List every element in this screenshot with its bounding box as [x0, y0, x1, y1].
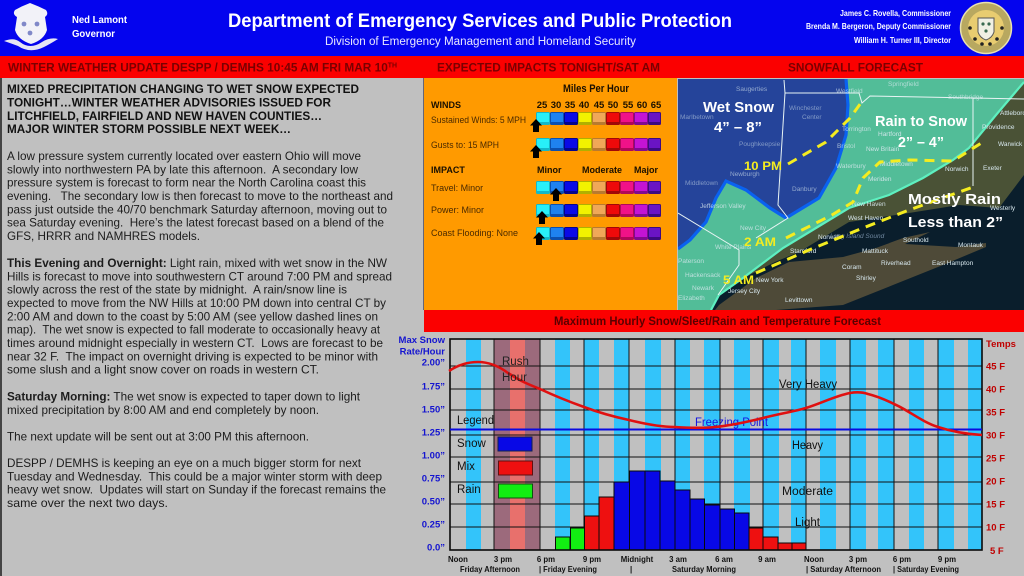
overview paragraph: GFS, HRRR and NAMHRES models.	[7, 229, 200, 243]
overview paragraph: pressure system is forecast to form near the North Carolina coast this	[7, 176, 366, 190]
hour axis labels: 6 pm	[893, 555, 911, 564]
map place names: Bristol	[837, 143, 856, 150]
next week storm paragraph	[7, 456, 386, 510]
map place names: New Britain	[866, 146, 900, 153]
map place names: White Plains	[715, 244, 752, 251]
travel row	[431, 181, 661, 201]
intensity labels: Heavy	[792, 440, 823, 452]
label: mostly rain: Less than 2”	[908, 214, 1003, 231]
map place names: Shirley	[856, 275, 877, 282]
left axis labels: 0.0”	[427, 542, 445, 554]
winds heading: WINDS	[431, 100, 461, 110]
map place names: Hartford	[878, 131, 902, 138]
this evening paragraph: expected to move from the NW Hills at 10:00 PM down into central CT by	[7, 296, 386, 310]
map place names: Stamford	[790, 248, 817, 255]
this evening paragraph: This Evening and Overnight: Light rain, mixed with wet snow in the NW	[7, 256, 388, 270]
governor name: Ned Lamont	[72, 14, 127, 26]
power row	[431, 204, 661, 224]
left axis labels: 2.00”	[422, 358, 445, 368]
intensity labels	[779, 379, 837, 529]
legend: Mix	[457, 461, 475, 473]
commissioner names: Brenda M. Bergeron, Deputy Commissioner	[806, 22, 952, 31]
this evening paragraph	[7, 256, 392, 377]
hour axis labels: 6 am	[715, 555, 733, 564]
map place names: Warwick	[998, 141, 1023, 148]
hour axis labels	[448, 555, 956, 564]
impact heading and scale: IMPACT	[431, 165, 465, 175]
heading: expected impacts: EXPECTED IMPACTS TONIGHT/SAT AM	[437, 60, 660, 74]
map place names: New Haven	[852, 201, 886, 208]
left axis labels: 0.50”	[422, 496, 445, 508]
overview paragraph: evening. The secondary low is then forecast to move to the northeast and	[7, 189, 393, 203]
intensity labels: Light	[795, 517, 821, 529]
right axis labels: 45 F	[986, 362, 1005, 372]
yellow dashed time lines	[756, 100, 986, 273]
map place names: Coram	[842, 264, 862, 271]
precipitation bars	[556, 471, 806, 550]
map place names: Torrington	[842, 126, 871, 133]
left axis labels: Max Snow	[399, 335, 446, 346]
wind speed scale: 55	[623, 100, 634, 111]
left axis labels: 0.75”	[422, 474, 445, 484]
saturday morning paragraph	[7, 390, 361, 417]
governor name	[72, 14, 127, 40]
label: wet snow: 4” – 8”	[714, 119, 762, 136]
map place names: Long Island Sound	[830, 233, 885, 240]
heading: winter weather update: TH	[388, 62, 397, 70]
blue hour stripes	[466, 339, 982, 550]
governor name: Governor	[72, 28, 115, 40]
map place names: Jersey City	[728, 288, 761, 295]
map place names: Saugerties	[736, 86, 768, 93]
map place names: Marlbetown	[680, 114, 714, 121]
map place names: Exeter	[983, 165, 1003, 172]
day period labels: Friday Afternoon	[460, 565, 520, 574]
rush hour label: Rush	[502, 356, 529, 368]
sustained winds row: Sustained Winds: 5 MPH	[431, 115, 526, 125]
wind speed scale: 50	[608, 100, 618, 111]
label: rain to snow: 2” – 4”	[898, 134, 944, 151]
map place names: West Haven	[848, 215, 884, 222]
time labels: 5 AM	[723, 273, 754, 287]
header banner	[0, 0, 1024, 56]
this evening paragraph: some slush and a light snow cover on roads in western CT.	[7, 363, 319, 377]
left axis labels: 1.75”	[422, 382, 445, 392]
this evening paragraph: map). The wet snow is expected to fall moderate to occasionally heavy at	[7, 323, 381, 337]
map place names: Levittown	[785, 297, 813, 304]
hour axis labels: 9 pm	[583, 555, 601, 564]
map place names: Montauk	[958, 242, 984, 249]
heading: winter weather update: WINTER WEATHER UPDATE DESPP / DEMHS 10:45 AM FRI MAR 10	[8, 60, 393, 74]
power row: Power: Minor	[431, 205, 484, 215]
next week storm paragraph: heavy wet snow. Updates will start on Sunday if the forecast remains the	[7, 483, 386, 497]
next week storm paragraph: Tuesday and Wednesday. This could be a major winter storm with deep	[7, 469, 382, 483]
map place names: Meriden	[868, 176, 892, 183]
this evening paragraph: near 32 F. The impact on overnight driving is expected to be minor with	[7, 349, 378, 363]
intensity labels: Very Heavy	[779, 379, 837, 391]
label: wet snow	[703, 102, 774, 132]
left axis labels	[399, 335, 446, 554]
legend: Rain	[457, 484, 481, 496]
travel row: Travel: Minor	[431, 183, 483, 193]
overview paragraph: A low pressure system currently located over eastern Ohio will move	[7, 149, 361, 163]
right axis labels: 15 F	[986, 500, 1005, 510]
map place names	[678, 81, 1024, 304]
map place names: Winchester	[789, 105, 822, 112]
label: rain to snow	[876, 115, 967, 147]
this evening paragraph: slowly across the rest of the state by midnight. A rain/snow line is	[7, 283, 347, 297]
wind speed scale: 40	[579, 100, 589, 111]
legend: Snow	[457, 438, 486, 450]
map place names: Hackensack	[685, 272, 721, 279]
right axis labels: 30 F	[986, 430, 1005, 442]
wind speed scale: 45	[594, 100, 605, 111]
day period labels: | Friday Evening	[539, 565, 597, 574]
map place names: New City	[740, 225, 767, 232]
wind speed scale: 60	[637, 100, 647, 111]
gusts row	[431, 138, 661, 158]
hour axis labels: 3 pm	[494, 555, 512, 564]
headline text: TONIGHT…WINTER WEATHER ADVISORIES ISSUED FOR	[7, 95, 331, 109]
heading: snowfall forecast: SNOWFALL FORECAST	[788, 60, 924, 74]
map place names: Springfield	[888, 81, 919, 88]
time labels	[723, 159, 782, 287]
left axis labels: 1.50”	[422, 404, 445, 416]
map place names: Elizabeth	[678, 295, 705, 302]
day period labels	[460, 565, 959, 574]
map place names: Southold	[903, 237, 929, 244]
wind speed scale	[537, 100, 662, 111]
chart title strip: Maximum Hourly Snow/Sleet/Rain and Temperature Forecast	[554, 316, 881, 328]
hour axis labels: Noon	[448, 555, 468, 564]
day period labels: | Saturday Afternoon	[806, 565, 881, 574]
right axis labels: 35 F	[986, 408, 1005, 418]
right axis labels: 25 F	[986, 454, 1005, 464]
impact heading and scale	[431, 165, 659, 175]
map place names: Southbridge	[948, 94, 983, 101]
map place names: Jefferson Valley	[700, 203, 746, 210]
rush hour band	[494, 339, 540, 550]
map place names: Providence	[982, 124, 1015, 131]
label: mostly rain: Mostly Rain	[908, 191, 1001, 208]
coast flooding row	[431, 227, 661, 245]
right axis labels: 40 F	[986, 384, 1005, 396]
hour axis labels: 3 pm	[849, 555, 867, 564]
right axis labels	[986, 339, 1016, 557]
label: wet snow: Wet Snow	[703, 99, 774, 116]
wind speed scale: 25	[537, 100, 548, 111]
chart title strip	[424, 310, 1024, 332]
overview paragraph	[7, 149, 393, 243]
headline text: MAJOR WINTER STORM POSSIBLE NEXT WEEK…	[7, 122, 291, 136]
right axis labels: 5 F	[990, 546, 1004, 557]
map place names: Westfield	[836, 88, 863, 95]
right axis labels: Temps	[986, 339, 1016, 350]
wind speed scale: 30	[551, 100, 561, 111]
map place names: Center	[802, 114, 822, 121]
commissioner names: James C. Rovella, Commissioner	[840, 9, 952, 18]
map place names: East Hampton	[932, 260, 974, 267]
right axis labels: 10 F	[986, 522, 1005, 534]
hour axis labels: 9 pm	[938, 555, 956, 564]
this evening paragraph: Hills is forecast to move into southwestern CT around 7:00 PM and spread	[7, 269, 392, 283]
headline text: MIXED PRECIPITATION CHANGING TO WET SNOW EXPECTED	[7, 82, 359, 96]
impact heading and scale: Major	[634, 165, 659, 175]
map place names: Mattituck	[862, 248, 889, 255]
map place names: Waterbury	[836, 163, 866, 170]
saturday morning paragraph: Saturday Morning: The wet snow is expected to taper down to light	[7, 390, 361, 404]
map place names: Paterson	[678, 258, 704, 265]
this evening paragraph: times around midnight especially in western CT. Lows are forecast to be	[7, 336, 383, 350]
temperature line	[449, 362, 982, 435]
day period labels: |	[630, 565, 632, 574]
map place names: Newark	[692, 285, 715, 292]
wind speed scale: 65	[651, 100, 662, 111]
freezing line: Freezing Point	[695, 415, 769, 429]
map place names: Newburgh	[730, 171, 760, 178]
map place names: Norwich	[945, 166, 969, 173]
day period labels: | Saturday Evening	[893, 565, 959, 574]
impact heading and scale: Minor	[537, 165, 562, 175]
hour axis labels: 9 am	[758, 555, 776, 564]
map place names: Middletown	[685, 180, 718, 187]
time labels: 2 AM	[744, 235, 776, 249]
miles per hour heading: Miles Per Hour	[563, 83, 630, 95]
map place names: Middletown	[880, 161, 913, 168]
headline text	[7, 82, 359, 136]
wind speed scale: 35	[565, 100, 576, 111]
overview paragraph: slowly into northwestern PA by late this afternoon. A secondary low	[7, 162, 358, 176]
panel: snowfall forecast map	[678, 79, 1024, 310]
next week storm paragraph: same over the next two days.	[7, 496, 168, 510]
left axis labels: 1.00”	[422, 450, 445, 462]
coast flooding row: Coast Flooding: None	[431, 228, 518, 238]
map place names: Danbury	[792, 186, 817, 193]
saturday morning paragraph: mixed precipitation by 8:00 AM and end completely by noon.	[7, 403, 319, 417]
subtitle: Division of Emergency Management and Homeland Security	[325, 36, 636, 48]
map place names: Norwalk	[818, 234, 842, 241]
intensity labels: Moderate	[782, 486, 833, 498]
rush hour label: Hour	[502, 372, 527, 384]
day period labels: Saturday Morning	[672, 565, 736, 574]
hour axis labels: Noon	[804, 555, 824, 564]
headline text: LITCHFIELD, FAIRFIELD AND NEW HAVEN COUNTIES…	[7, 109, 322, 123]
time labels: 10 PM	[744, 159, 782, 173]
label: mostly rain	[909, 193, 1002, 227]
overview paragraph: sea Saturday evening. Here’s the latest forecast based on a blend of the	[7, 216, 384, 230]
next update note: The next update will be sent out at 3:00 PM this afternoon.	[7, 430, 309, 444]
rush hour label	[502, 356, 529, 384]
overview paragraph: pass just outside the 40/70 benchmark Saturday afternoon, moving out to	[7, 202, 387, 216]
map place names: New York	[756, 277, 784, 284]
main title: Department of Emergency Services and Public Protection	[228, 11, 732, 32]
gusts row: Gusts to: 15 MPH	[431, 140, 499, 150]
commissioner names: William H. Turner III, Director	[854, 36, 952, 45]
commissioner names	[806, 9, 952, 45]
label: rain to snow: Rain to Snow	[875, 113, 967, 130]
grid lines	[450, 339, 982, 550]
hour axis labels: 6 pm	[537, 555, 555, 564]
left axis labels: 1.25”	[422, 428, 445, 438]
chart: hourly snow rate and temperature	[399, 335, 1016, 574]
section title strip	[0, 56, 1024, 78]
right axis labels: 20 F	[986, 476, 1005, 488]
impact heading and scale: Moderate	[582, 165, 622, 175]
legend: Legend	[457, 415, 494, 427]
hour axis labels: Midnight	[621, 555, 654, 564]
hour axis labels: 3 am	[669, 555, 687, 564]
map place names: Riverhead	[881, 260, 911, 267]
plot frame	[450, 339, 982, 550]
icon: Connecticut state seal	[4, 3, 58, 50]
map place names: Westerly	[990, 205, 1016, 212]
panel: forecast text	[0, 78, 393, 576]
legend	[457, 415, 532, 498]
icon: DESPP gold seal	[960, 2, 1012, 54]
left axis labels: Rate/Hour	[400, 346, 445, 358]
next week storm paragraph: DESPP / DEMHS is keeping an eye on a much bigger storm for next	[7, 456, 362, 470]
this evening paragraph: 2:00 AM and down to the coast by 5:00 AM (see yellow dashed lines on	[7, 309, 378, 323]
left axis labels: 0.25”	[422, 520, 445, 530]
panel: expected impacts	[423, 78, 677, 310]
map place names: Poughkeepsie	[739, 141, 781, 148]
sustained winds row	[431, 112, 661, 132]
